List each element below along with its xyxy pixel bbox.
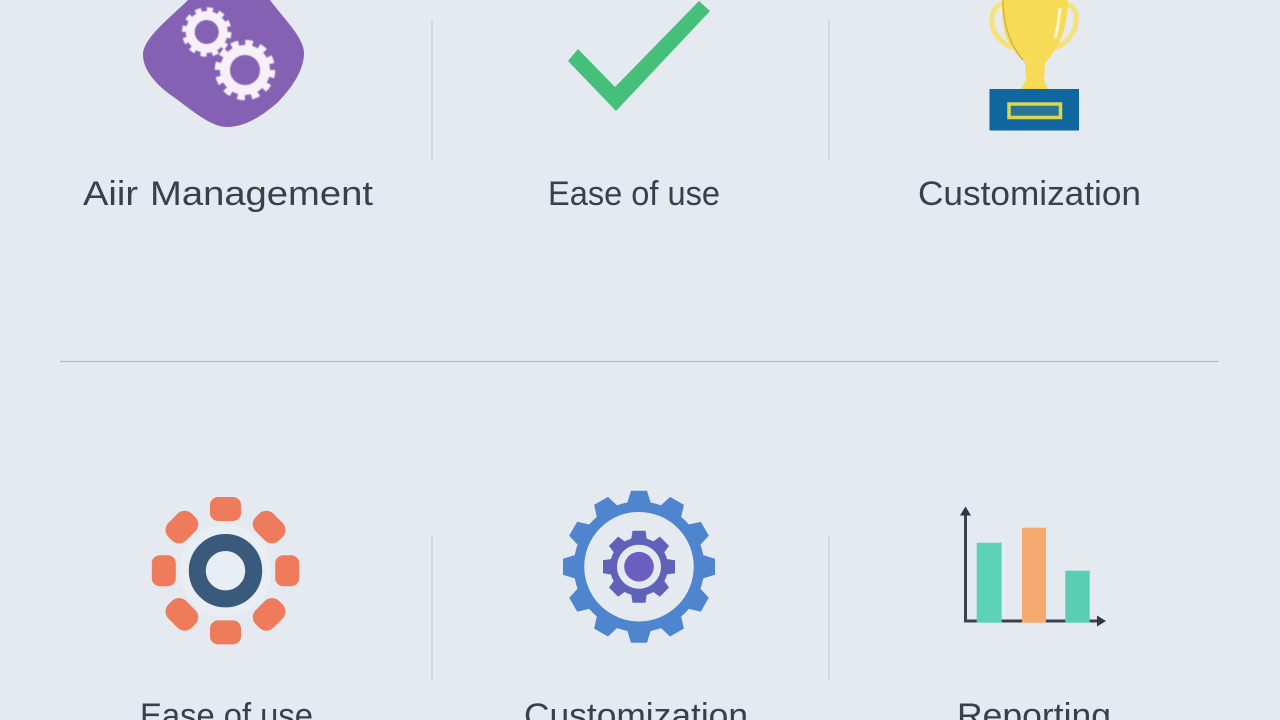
icon: orange segmented ring [152,497,299,644]
icon: purple blob with gears [143,0,304,127]
icon: blue gear with inner gear [563,491,715,643]
icon: trophy [990,0,1079,130]
label: risk management [83,175,374,213]
icon: bar chart [960,506,1106,626]
panel: customization bottom [524,491,748,720]
icon: green check mark [568,1,710,111]
panel: ease of use bottom [140,497,313,720]
panel: risk management [83,0,374,213]
label: customization: Customization [918,175,1141,213]
panel: reporting [957,506,1111,720]
panel: customization top [918,0,1141,213]
label: risk management: Aiir [83,175,138,213]
label: ease of use: Ease of use [548,175,720,213]
panel: ease of use top [548,1,720,213]
label: risk management: Management [150,175,374,213]
